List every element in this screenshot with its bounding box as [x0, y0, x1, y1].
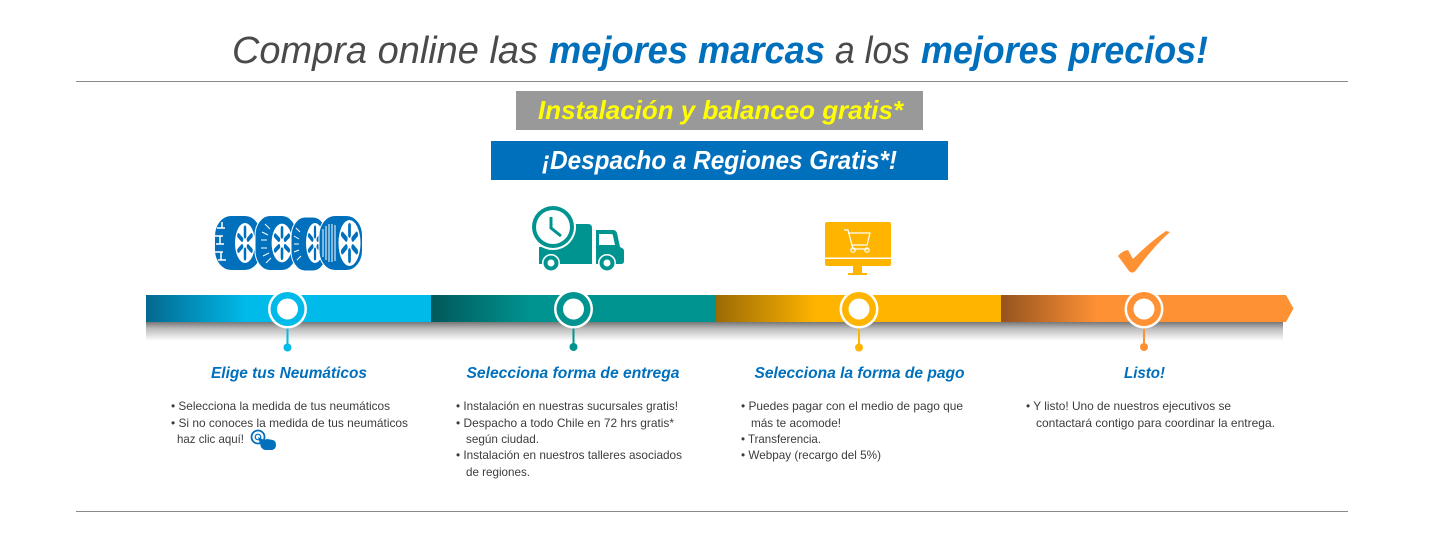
text: step 4 details: contactará contigo para coordinar la entrega. [1036, 416, 1275, 430]
heading: step 1: Elige tus Neumáticos [211, 365, 367, 382]
text: step 4 details: • Y listo! Uno de nuestros ejecutivos se [1026, 399, 1231, 413]
text: step 3 details: más te acomode! [751, 416, 841, 430]
title: a los [835, 30, 910, 72]
text: step 2 details: de regiones. [466, 465, 530, 479]
icon: delivery truck with clock [530, 204, 624, 272]
text: step 2 details [456, 399, 682, 479]
text: step 2 details: • Despacho a todo Chile en 72 hrs gratis* [456, 416, 674, 430]
text: step 3 details: • Webpay (recargo del 5%) [741, 448, 881, 462]
text: step 2 details: según ciudad. [466, 432, 539, 446]
title: mejores marcas [549, 30, 825, 72]
text: step 1 details: • Si no conoces la medida de tus neumáticos [171, 416, 408, 430]
title: Compra online las [232, 30, 538, 72]
marker: step 2 [554, 290, 593, 351]
icon: tires [215, 216, 362, 271]
banner: despacho [491, 141, 948, 180]
text: step 4 details [1026, 399, 1275, 430]
marker: step 3 [840, 290, 878, 352]
text: step 3 details: • Transferencia. [741, 432, 821, 446]
timeline bar [146, 295, 1294, 341]
text: step 3 details [741, 399, 963, 462]
marker: step 4 [1124, 290, 1164, 351]
text: step 2 details: • Instalación en nuestros talleres asociados [456, 448, 682, 462]
text: step 1 details: • Selecciona la medida de tus neumáticos [171, 399, 390, 413]
banner: instalación [516, 91, 923, 130]
icon: check mark [1118, 231, 1170, 273]
marker: step 1 [268, 290, 307, 352]
banner: despacho: ¡Despacho a Regiones Gratis*! [542, 145, 897, 175]
heading: step 4: Listo! [1124, 365, 1166, 382]
text: step 3 details: • Puedes pagar con el medio de pago que [741, 399, 963, 413]
text: step 1 details: haz clic aquí! [177, 432, 244, 446]
icon: click hand [252, 430, 276, 450]
banner: instalación: Instalación y balanceo gratis* [538, 95, 905, 125]
title: mejores precios! [921, 30, 1208, 72]
title [232, 30, 1208, 72]
heading: step 2: Selecciona forma de entrega [466, 365, 680, 382]
heading: step 3: Selecciona la forma de pago [754, 365, 965, 382]
text: step 2 details: • Instalación en nuestras sucursales gratis! [456, 399, 678, 413]
text: step 1 details [171, 399, 408, 446]
icon: monitor with cart [825, 222, 891, 275]
